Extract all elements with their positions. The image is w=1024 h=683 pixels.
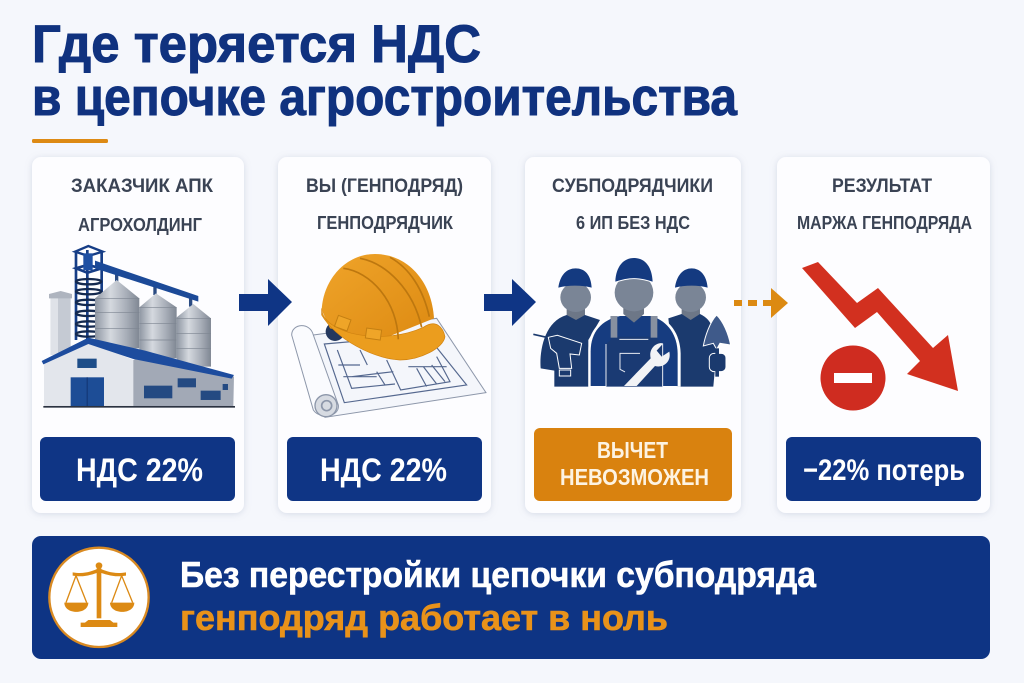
icon: falling red arrow	[802, 262, 958, 391]
badge: contractor VAT: НДС 22%	[320, 452, 447, 488]
badge: losses: −22% потерь	[803, 454, 965, 487]
customer heading: АГРОХОЛДИНГ	[78, 215, 202, 235]
title accent rule	[32, 139, 108, 143]
subcontractors heading: 6 ИП БЕЗ НДС	[576, 213, 690, 233]
result heading: РЕЗУЛЬТАТ	[832, 176, 932, 197]
subcontractors heading: СУБПОДРЯДЧИКИ	[552, 176, 713, 197]
conclusion text	[180, 554, 817, 638]
customer heading	[71, 176, 213, 235]
customer heading: ЗАКАЗЧИК АПК	[71, 176, 213, 197]
arrow: customer to contractor	[239, 279, 292, 326]
conclusion text: Без перестройки цепочки субподряда	[180, 554, 817, 595]
badge: customer VAT: НДС 22%	[76, 452, 203, 488]
arrow: dashed to result	[734, 288, 788, 318]
title: Где теряется НДС	[32, 15, 481, 74]
panel: subcontractors	[525, 157, 741, 513]
contractor heading: ВЫ (ГЕНПОДРЯД)	[306, 176, 463, 197]
badge: losses	[786, 437, 981, 501]
icon: grain elevator and warehouse	[42, 246, 235, 408]
title	[32, 15, 737, 127]
icon: scales	[49, 548, 149, 647]
result heading: МАРЖА ГЕНПОДРЯДА	[797, 213, 972, 233]
panel: conclusion banner	[32, 536, 990, 659]
badge: customer VAT	[40, 437, 235, 501]
badge: deduction impossible	[534, 428, 732, 501]
badge: deduction impossible: НЕВОЗМОЖЕН	[560, 464, 709, 490]
panel: result	[777, 157, 990, 513]
badge: contractor VAT	[287, 437, 482, 501]
badge: deduction impossible: ВЫЧЕТ	[597, 437, 668, 463]
panel: general contractor	[278, 157, 491, 513]
contractor heading: ГЕНПОДРЯДЧИК	[317, 213, 454, 233]
contractor heading	[306, 176, 463, 233]
icon: hard hat on blueprint	[292, 254, 486, 417]
panel: customer	[32, 157, 244, 513]
icon: no-entry sign	[820, 346, 886, 410]
arrow: contractor to subcontractors	[484, 279, 536, 326]
icon: three workers with tools	[533, 258, 731, 387]
title: в цепочке агростроительства	[32, 68, 737, 127]
conclusion text: генподряд работает в ноль	[180, 597, 668, 638]
result heading	[797, 176, 972, 233]
subcontractors heading	[552, 176, 713, 233]
